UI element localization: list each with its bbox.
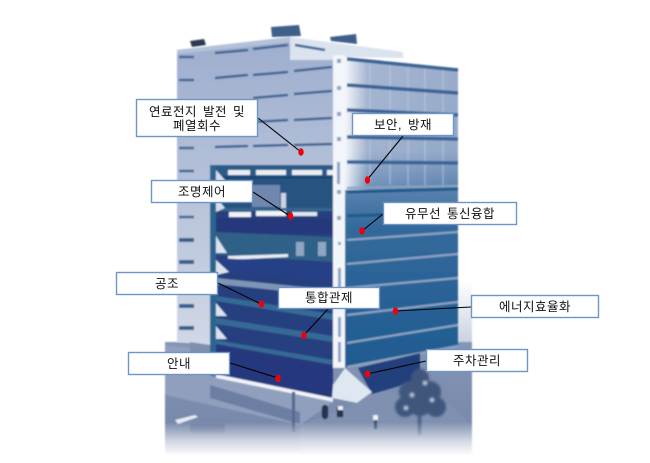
rooftop units [190, 25, 357, 47]
right base [358, 353, 420, 394]
ground fade [160, 422, 478, 456]
building illustration [165, 25, 472, 455]
label: communications [384, 202, 516, 224]
label: security [352, 114, 454, 136]
label: integrated control [278, 288, 380, 308]
label: lighting [152, 180, 252, 202]
label: communications: 유무선 통신융합 [405, 207, 495, 221]
left facade windows [179, 45, 332, 328]
label: fuel cell [136, 100, 258, 136]
label: energy efficiency [472, 296, 598, 318]
right facade [345, 57, 458, 368]
entrance canopy [332, 368, 372, 403]
hotspot dots [259, 148, 398, 382]
left opening [210, 165, 333, 402]
label: integrated control: 통합관제 [305, 291, 353, 305]
label: guidance [128, 352, 230, 374]
roof [177, 37, 403, 60]
label: lighting: 조명제어 [178, 185, 226, 199]
label: guidance: 안내 [167, 357, 191, 371]
left facade [177, 37, 333, 370]
people and posts [292, 392, 378, 432]
left base [190, 342, 210, 375]
label: parking [426, 350, 528, 372]
label: air conditioning: 공조 [155, 277, 179, 291]
label: security: 보안, 방재 [374, 118, 432, 132]
label: air conditioning [116, 272, 218, 294]
label: fuel cell: 폐열회수 [173, 119, 221, 133]
tree [395, 369, 446, 435]
label: parking: 주차관리 [453, 354, 501, 368]
label: fuel cell: 연료전지 발전 및 [149, 105, 245, 119]
corner pillar [333, 55, 345, 368]
ground [165, 280, 472, 455]
label: energy efficiency: 에너지효율화 [499, 300, 571, 314]
leader lines [218, 118, 471, 378]
